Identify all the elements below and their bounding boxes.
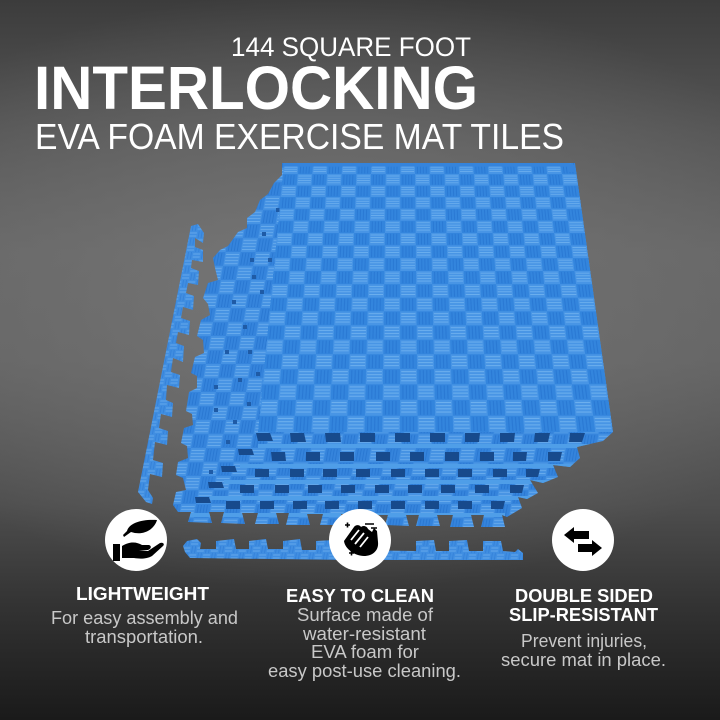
- heading: easy to clean: EASY TO CLEAN: [286, 585, 434, 606]
- title block: [34, 32, 564, 157]
- title line: 144 square foot: 144 SQUARE FOOT: [231, 32, 471, 62]
- top mat tile with checker weave: [258, 163, 613, 432]
- feature: easy to clean: [268, 509, 461, 681]
- heading: lightweight: LIGHTWEIGHT: [76, 583, 210, 604]
- description: easy to clean: water-resistant: [302, 624, 426, 644]
- left loose border strip: [138, 224, 204, 504]
- stacked tile silhouette: [173, 163, 613, 527]
- bottom loose border strip: [183, 539, 523, 560]
- title line: EVA foam exercise mat tiles: EVA FOAM EXERCISE MAT TILES: [35, 116, 564, 157]
- layer edge shadows in stacked left corner: [209, 208, 280, 474]
- feature: lightweight: [51, 509, 238, 647]
- description: easy to clean: EVA foam for: [311, 642, 419, 662]
- description: easy to clean: Surface made of: [297, 605, 434, 625]
- title line: interlocking: INTERLOCKING: [34, 54, 478, 122]
- feature: double sided slip-resistant: [501, 509, 666, 670]
- description: easy to clean: easy post-use cleaning.: [268, 661, 461, 681]
- layer front walls: [190, 446, 603, 515]
- description: double sided slip-resistant: secure mat in place.: [501, 650, 666, 670]
- mat stack lower layers and loose border strips: [138, 163, 613, 560]
- description: lightweight: [51, 608, 238, 647]
- heading: double sided slip-resistant: SLIP-RESISTANT: [509, 604, 659, 625]
- description: easy to clean: [268, 605, 461, 681]
- icon: hand holding leaf: [105, 509, 167, 571]
- icon: opposing arrows: [552, 509, 614, 571]
- interlock holes between tile teeth: [195, 433, 585, 509]
- description: lightweight: For easy assembly and: [51, 608, 238, 628]
- description: lightweight: transportation.: [85, 627, 203, 647]
- heading: double sided slip-resistant: DOUBLE SIDED: [515, 585, 653, 606]
- heading: double sided slip-resistant: [509, 585, 659, 625]
- description: double sided slip-resistant: [501, 631, 666, 670]
- icon: clapping hands: [329, 509, 391, 571]
- description: double sided slip-resistant: Prevent injuries,: [521, 631, 647, 651]
